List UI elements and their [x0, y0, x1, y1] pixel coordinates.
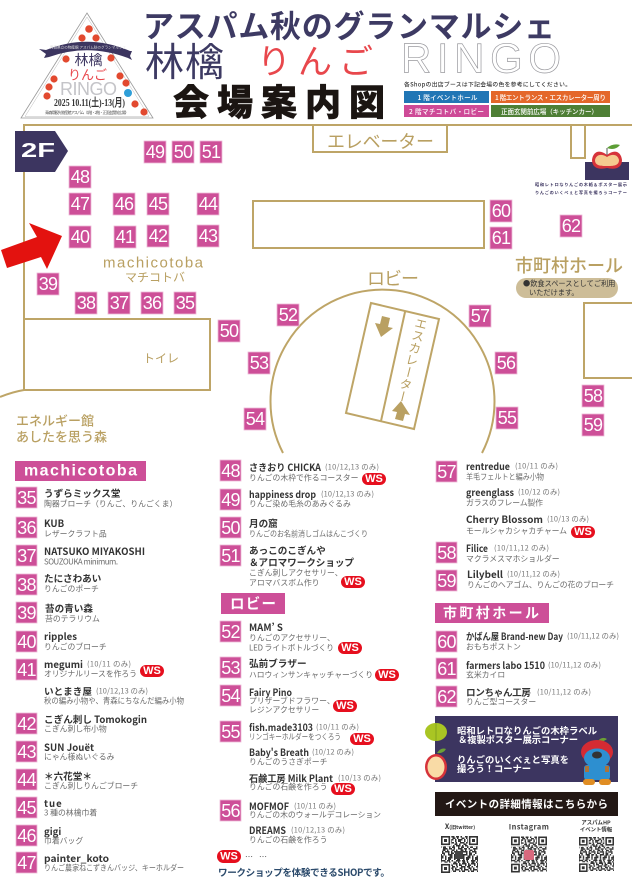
listing 47: りんご農家ねこずきんバッジ、キーホルダー	[44, 862, 184, 874]
listing 53: 弘前ブラザー	[249, 656, 307, 670]
listing 58: 58	[437, 543, 456, 563]
listing 57: Cherry Blossom	[466, 512, 543, 526]
icon: apple corner marker: りんごのいくべぇと写真を撮ろうコーナー	[535, 189, 627, 196]
listing 60: かばん屋 Brand-new Day	[466, 629, 563, 643]
listing 55: (10/13 のみ)	[338, 772, 381, 784]
escalator label and arrows	[375, 315, 432, 421]
map booth numbers: 50	[220, 321, 239, 341]
listing 59: りんごのヘアゴム、りんごの花のブローチ	[467, 580, 614, 590]
listing 56: (10/11 のみ)	[294, 800, 336, 812]
map booth numbers: 61	[492, 228, 511, 248]
listing 56: (10/12,13 のみ)	[291, 824, 345, 836]
map booth numbers: 53	[250, 353, 269, 373]
listing 47: 47	[17, 853, 36, 873]
listing 55: fish.made3103	[249, 720, 313, 734]
map booth numbers: 57	[471, 306, 490, 326]
map labels: エレベーター	[327, 128, 434, 154]
listing 56: りんごの石鹸を作ろう	[249, 834, 327, 846]
panel: retro apple corner: ＆複製ポスター展示コーナー	[458, 732, 578, 746]
listing 57: (10/11 のみ)	[515, 460, 558, 472]
listing 56: MOFMOF	[249, 799, 289, 813]
listing 58: Filice	[466, 541, 488, 555]
listing 51: あっこのこぎんや	[249, 543, 326, 557]
listing 57: WS	[574, 526, 592, 538]
listing 51: こぎん刺しアクセサリー、	[249, 568, 343, 578]
listing 55: 石鹸工房 Milk Plant	[249, 771, 333, 785]
map booth numbers: 59	[584, 415, 603, 435]
callout: eating space: ●飲食スペースとしてご利用	[523, 279, 615, 289]
map labels: エネルギー館	[16, 410, 94, 430]
map booth numbers: 37	[110, 293, 129, 313]
listing 45: tue	[44, 796, 63, 810]
heading: venue map: 会場案内図	[173, 74, 385, 126]
listing 52: LED ライトボトルづくり	[249, 642, 334, 654]
heading: machicotoba: machicotoba	[24, 462, 137, 480]
panel: retro apple corner: 昭和レトロなりんごの木枠ラベル	[457, 723, 597, 737]
listing 50: 月の窟	[249, 516, 278, 530]
listing 37: SOUZOUKA minimum.	[44, 556, 118, 568]
listing 42	[16, 712, 147, 734]
callout: eating space	[516, 278, 618, 298]
listing 45: 3 種の林檎巾着	[44, 808, 97, 818]
listing 59: 59	[437, 571, 456, 591]
listing 44: ＊六花堂＊	[44, 769, 92, 783]
listing 55: りんごの石鹸を作ろう	[249, 782, 327, 792]
listing 53: WS	[378, 669, 396, 681]
listing 37: 37	[17, 546, 36, 566]
listing 56: DREAMS	[249, 823, 286, 837]
legend: booth colours: 各Shopの出店ブースは下記会場の色を参考にしてください。	[404, 80, 571, 88]
listing 52	[220, 620, 362, 654]
listing 54: レジンアクセサリー	[249, 704, 319, 716]
listing 37	[16, 544, 145, 568]
map booth numbers: 46	[115, 194, 134, 214]
subtitle: 林檎 りんご RINGO: 林檎	[145, 32, 224, 88]
listing 56: りんごの木のウォールデコレーション	[249, 810, 381, 820]
listing 49: (10/12,13 のみ)	[321, 488, 374, 500]
map booth numbers: 43	[199, 226, 218, 246]
listing 36: KUB	[44, 516, 65, 530]
listing 36: レザークラフト品	[44, 528, 107, 540]
map booth numbers: 50	[174, 142, 193, 162]
map booth numbers: 35	[176, 293, 195, 313]
icon: apple corner marker	[535, 144, 629, 196]
listing 48	[220, 460, 386, 485]
map booth numbers: 52	[279, 305, 298, 325]
listing 43: 43	[17, 742, 36, 762]
map booth numbers: 51	[202, 142, 221, 162]
listing 43: SUN Jouët	[44, 740, 94, 754]
QR block: Instagram	[509, 822, 549, 873]
listing 51: WS	[344, 576, 362, 588]
listing 41: いとまき屋	[44, 684, 92, 698]
listing 35: 陶器ブローチ（りんご、りんごくま）	[44, 498, 177, 510]
map booth numbers: 48	[71, 167, 90, 187]
listing 55: 55	[221, 722, 240, 742]
listing 46: 巾着バッグ	[44, 836, 83, 846]
map booth numbers: 41	[116, 227, 135, 247]
map labels: machicotoba	[103, 254, 204, 272]
listing 56: 56	[221, 801, 240, 821]
listing 39	[16, 601, 100, 624]
panel: retro apple corner	[425, 716, 618, 785]
arrow: entrance	[1, 223, 62, 269]
listing 40: りんごのブローチ	[44, 642, 107, 652]
subtitle: 林檎 りんご RINGO	[145, 32, 561, 88]
map booth numbers: 58	[584, 386, 603, 406]
listing 50: 50	[221, 518, 240, 538]
listing 59	[436, 567, 614, 591]
map labels: 市町村ホール	[515, 252, 623, 278]
listing 38: たにさわあい	[44, 571, 102, 585]
listing 55: (10/11 のみ)	[316, 722, 359, 732]
subtitle: 林檎 りんご RINGO: りんご	[257, 34, 373, 84]
listing 40	[16, 629, 107, 652]
map labels: トイレ	[143, 350, 179, 366]
listing 52: WS	[341, 642, 359, 654]
listing 57: greenglass	[466, 485, 514, 499]
listing 39: 39	[17, 603, 36, 623]
map booth numbers: 62	[562, 216, 581, 236]
listing 49	[220, 487, 374, 510]
heading: 市町村ホール: 市町村ホール	[443, 603, 539, 623]
listing 41: (10/11 のみ)	[87, 658, 131, 670]
listing 38: りんごのポーチ	[44, 584, 99, 594]
listing 62: 62	[437, 687, 456, 707]
floor tag: 2F	[15, 131, 68, 172]
map labels: ロビー	[367, 265, 419, 291]
listing 52: 52	[221, 622, 240, 642]
legend: WS workshop note: ……	[245, 852, 267, 862]
listing 46: gigi	[44, 824, 61, 838]
QR block: Aspam HP: イベント情報	[580, 826, 613, 834]
listing 62	[436, 685, 591, 708]
listing 55: WS	[353, 733, 371, 745]
legend: booth colours: 2 階マチコトバ・ロビー	[409, 106, 484, 116]
logo: triangle emblem: 青森県立の物産館 アスパム秋のグランマルシェ	[50, 44, 127, 50]
listing 55: (10/12 のみ)	[312, 746, 354, 758]
legend: WS workshop note	[217, 850, 390, 879]
map booth numbers: 54	[246, 409, 265, 429]
map booth numbers: 56	[497, 353, 516, 373]
listing 39: 苔の青い森	[45, 601, 93, 615]
listing 36: 36	[17, 518, 36, 538]
floor plan walls	[0, 125, 632, 453]
listing 51	[220, 543, 365, 588]
listing 41: WS	[143, 665, 161, 677]
listing 58: マクラメスマホショルダー	[466, 554, 560, 564]
listing 54: WS	[336, 700, 354, 712]
listing 62: (10/11,12 のみ)	[537, 686, 591, 698]
logo: triangle emblem: RINGO	[60, 79, 117, 99]
QR block: Aspam HP	[579, 818, 614, 872]
listing 58	[436, 541, 560, 564]
listing 52: りんごのアクセサリー、	[249, 632, 335, 644]
listing 51: ＆アロマワークショップ	[249, 555, 354, 569]
escalator label and arrows: エスカレーター	[392, 315, 432, 405]
map labels: あしたを思う森	[16, 426, 107, 446]
map booth numbers: 60	[492, 201, 511, 221]
listing 51: 51	[221, 546, 240, 566]
listing 41: 41	[17, 660, 36, 680]
listing 48: (10/12,13 のみ)	[325, 462, 379, 472]
listing 48: りんごの木枠で作るコースター	[249, 472, 359, 484]
QR block: Aspam HP: アスパムHP	[581, 818, 611, 826]
listing 41: megumi	[44, 657, 83, 671]
listing 53: 53	[221, 658, 240, 678]
listing 57: (10/13 のみ)	[547, 514, 589, 524]
logo: triangle emblem	[21, 13, 153, 118]
title: アスパム秋のグランマルシェ	[143, 2, 555, 46]
legend: WS workshop note: WS	[220, 850, 238, 862]
listing 54: 54	[221, 686, 240, 706]
listing 36	[16, 516, 107, 540]
logo: triangle emblem: りんご	[68, 64, 107, 84]
legend: booth colours: 1 階イベントホール	[418, 92, 478, 102]
listing 42: 42	[17, 714, 36, 734]
listing 49: 49	[221, 490, 240, 510]
listing 53	[220, 656, 399, 681]
listing 43: にゃん様ぬいぐるみ	[44, 752, 115, 762]
listing 51: アロマバスボム作り	[249, 578, 320, 588]
listing 58: (10/11,12 のみ)	[494, 542, 549, 554]
panel: retro apple corner: 撮ろう！コーナー	[457, 761, 531, 775]
listing 41: オリジナルリースを作ろう	[44, 668, 137, 680]
map booth numbers	[37, 141, 604, 436]
listing 56	[220, 799, 381, 846]
listing 49: happiness drop	[249, 487, 316, 501]
listing 38	[16, 571, 102, 595]
listing 62: ロンちゃん工房	[466, 685, 531, 699]
listing 62: りんご型コースター	[466, 696, 536, 708]
logo: triangle emblem: 林檎	[74, 50, 102, 70]
subtitle: 林檎 りんご RINGO: RINGO	[401, 34, 561, 82]
listing 57: 57	[437, 462, 456, 482]
map booth numbers: 45	[149, 194, 168, 214]
icon: apple corner marker: 昭和レトロなりんごの木箱＆ポスター展示	[535, 181, 627, 188]
listing 44: 44	[17, 770, 36, 790]
map booth numbers: 49	[146, 142, 165, 162]
listing 57	[436, 459, 595, 538]
logo: triangle emblem: 2025 10.11(土)-13(月)	[54, 95, 125, 109]
listing 46	[16, 824, 83, 846]
listing 61	[436, 658, 601, 680]
listing 55: リンゴキーホルダーをつくろう	[249, 732, 341, 742]
QR block: Instagram: Instagram	[509, 822, 549, 832]
listing 60	[436, 629, 619, 652]
listing 54	[220, 685, 357, 716]
listing 48: さきおり CHICKA	[249, 460, 322, 474]
logo: triangle emblem: 青森県観光物産館アスパム（1階・2階・正面玄関前広場）	[45, 109, 129, 116]
icon: green apple	[425, 723, 447, 741]
listing 53: ハロウィンサンキャッチャーづくり	[249, 670, 373, 680]
icon: mascot Ikube	[581, 738, 613, 785]
listing 39: 苔のテラリウム	[45, 614, 100, 624]
icon: red apple slice	[425, 748, 447, 780]
listing 43	[16, 740, 115, 762]
listing 57: 羊毛フェルトと編み小物	[466, 472, 544, 482]
listing 35: うずらミックス堂	[44, 486, 121, 500]
listing 50	[220, 516, 368, 540]
listing 61: 61	[437, 659, 456, 679]
QR block: X: X(旧twitter)	[445, 822, 475, 832]
banner: event details	[435, 792, 618, 816]
map labels	[16, 128, 623, 446]
listing 42: こぎん刺し Tomokogin	[44, 712, 147, 726]
listing 60: 60	[437, 632, 456, 652]
map booth numbers: 36	[143, 293, 162, 313]
listing 59: (10/11,12 のみ)	[507, 568, 560, 580]
listing 54: プリザーブドフラワー、	[249, 696, 335, 706]
listing 61: 玄米カイロ	[466, 670, 505, 680]
legend: booth colours: 1 階エントランス・エスカレーター周り	[495, 92, 606, 102]
listing 37: NATSUKO MIYAKOSHI	[44, 544, 145, 558]
listing 57: (10/12 のみ)	[518, 486, 560, 498]
listing 55: Baby's Breath	[249, 745, 309, 759]
heading: ロビー: ロビー	[230, 593, 276, 614]
listing 57: ガラスのフレーム製作	[466, 498, 543, 508]
listing 55	[220, 720, 381, 795]
listing 40: ripples	[44, 629, 77, 643]
map booth numbers: 55	[498, 408, 517, 428]
map booth numbers: 44	[199, 194, 218, 214]
callout: eating space: いただけます。	[529, 288, 579, 298]
listing 46: 46	[17, 826, 36, 846]
listing 50: りんごのお名前消しゴムはんこづくり	[249, 528, 368, 540]
map booth numbers: 47	[71, 194, 90, 214]
QR block: X	[440, 822, 478, 874]
listing 59: Lilybell	[467, 567, 503, 581]
map booth numbers: 39	[39, 274, 58, 294]
listing 61: farmers labo 1510	[466, 658, 545, 672]
listing 45: 45	[17, 798, 36, 818]
legend: booth colours	[404, 80, 610, 117]
listing 61: (10/11,12 のみ)	[548, 660, 601, 670]
listing 44	[16, 769, 138, 792]
listing 52: MAM’ S	[249, 620, 283, 634]
listing 57: rentredue	[466, 459, 510, 473]
floor tag: 2F: 2F	[21, 140, 55, 162]
map labels: マチコトバ	[125, 268, 185, 286]
banner: event details: イベントの詳細情報はこちらから	[445, 796, 608, 812]
listing 40: 40	[17, 632, 36, 652]
listing 48: 48	[221, 461, 240, 481]
listing 55: りんごのうさぎポーチ	[249, 756, 328, 768]
legend: booth colours: 正面玄関前広場（キッチンカー）	[501, 106, 598, 116]
listing 49: りんご染め毛糸のあみぐるみ	[249, 498, 351, 510]
listing 35	[16, 486, 177, 510]
listing 54: Fairy Pino	[249, 685, 292, 699]
listing 60: (10/11,12 のみ)	[567, 630, 619, 642]
map booth numbers: 38	[77, 293, 96, 313]
listing 48: WS	[365, 473, 383, 485]
listing 60: おもちポストン	[466, 642, 521, 652]
listing 47: painter_koto	[44, 851, 109, 865]
legend: WS workshop note: ワークショップを体験できるSHOPです。	[218, 865, 390, 879]
listing 42: こぎん刺し布小物	[44, 724, 107, 734]
listing 47	[16, 851, 184, 874]
listing 44: こぎん刺しりんごブローチ	[44, 780, 138, 792]
listing 55: WS	[334, 783, 352, 795]
listing 38: 38	[17, 575, 36, 595]
listing 41: 秋の編み小物や、青森にちなんだ編み小物	[44, 696, 184, 706]
listing 41	[16, 657, 184, 706]
listing 41: (10/12,13 のみ)	[96, 686, 148, 696]
map booth numbers: 42	[149, 226, 168, 246]
listing 45	[16, 796, 97, 818]
listing 57: モールシャカシャカチャーム	[466, 526, 567, 536]
panel: retro apple corner: りんごのいくべぇと写真を	[457, 752, 569, 766]
listing 35: 35	[17, 488, 36, 508]
map booth numbers: 40	[71, 227, 90, 247]
